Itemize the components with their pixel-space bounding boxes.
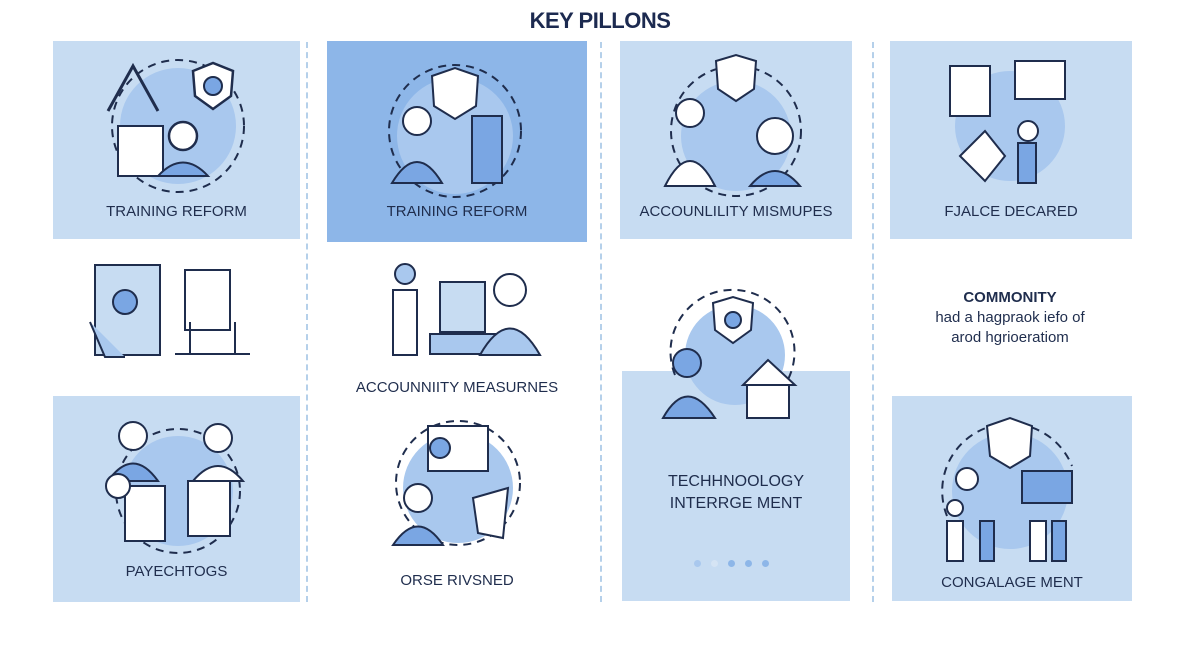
panel: congalage ment: CONGALAGE MENT	[941, 574, 1083, 591]
icon: accountability col2	[392, 263, 542, 356]
panel: falce decared: FJALCE DECARED	[944, 203, 1078, 220]
text block: commonity: had a hagpraok iefo of	[935, 309, 1085, 326]
text block: commonity: arod hgrioeratiom	[951, 329, 1069, 346]
panel: congalage ment	[892, 396, 1132, 601]
icon: officer	[388, 64, 522, 198]
icon: community	[941, 417, 1073, 562]
panel: technology	[622, 371, 850, 601]
panel: accountability measures: ACCOUNLILITY MISMUPES	[639, 203, 833, 220]
panel: training reform 1	[53, 41, 300, 239]
icon: documents	[949, 60, 1066, 184]
label: accountability: ACCOUNNIITY MEASURNES	[356, 379, 558, 396]
icon: people	[105, 421, 245, 554]
icon: trainer	[106, 59, 245, 193]
icon: documents col1	[89, 264, 250, 358]
panel: technology: INTERRGE MENT	[670, 495, 802, 512]
icon: two people	[663, 54, 802, 197]
panel: training reform 2: TRAINING REFORM	[387, 203, 527, 220]
text block: commonity: COMMONITY	[963, 289, 1057, 306]
label: TRAINING REFORM	[106, 203, 247, 220]
icon: orse rivsned	[391, 420, 521, 546]
panel: training reform 2	[327, 41, 587, 242]
title: KEY PILLONS	[530, 8, 670, 33]
text block: commonity	[935, 289, 1085, 346]
panel: falce decared	[890, 41, 1132, 239]
label: orse rivsned: ORSE RIVSNED	[400, 572, 514, 589]
panel: payechtogs	[53, 396, 300, 602]
panel: accountability measures	[620, 41, 852, 239]
icon: officer and building	[661, 288, 798, 419]
panel: technology: TECHHNOOLOGY	[668, 473, 804, 490]
dots	[694, 560, 769, 567]
panel: payechtogs: PAYECHTOGS	[126, 563, 227, 580]
